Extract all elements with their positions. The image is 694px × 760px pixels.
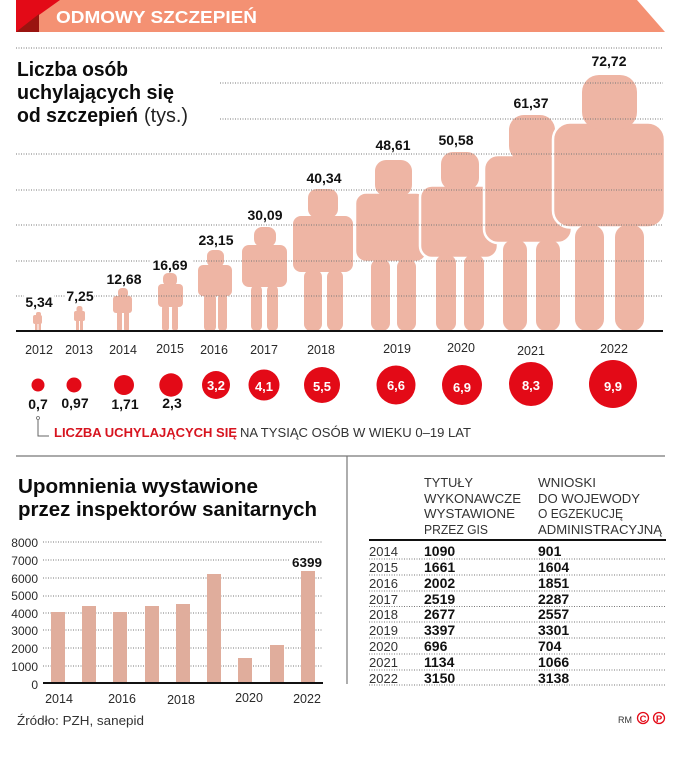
legend: LICZBA UCHYLAJĄCYCH SIĘ xyxy=(54,425,237,440)
red circles: rate per thousand: 0,7 xyxy=(28,396,48,412)
year labels: 2012 xyxy=(25,343,53,357)
person 2017 xyxy=(242,227,287,331)
y axis labels: 8000 xyxy=(11,536,38,550)
person 2015 xyxy=(158,273,183,331)
column header 1: WYKONAWCZE xyxy=(424,491,521,506)
person 2022 xyxy=(553,75,665,331)
year labels: 2018 xyxy=(307,343,335,357)
table rows: 1090 xyxy=(424,543,455,559)
person 2012 xyxy=(33,312,42,331)
table rows: 2287 xyxy=(538,591,569,607)
source: Źródło: PZH, sanepid xyxy=(17,713,144,728)
year labels xyxy=(25,341,628,358)
red circles: rate per thousand: 4,1 xyxy=(255,379,273,394)
column header 2: O EGZEKUCJĘ xyxy=(538,506,623,521)
table rows: 2015 xyxy=(369,560,398,575)
y axis labels xyxy=(11,536,38,692)
y axis labels: 2000 xyxy=(11,642,38,656)
column header 2: DO WOJEWODY xyxy=(538,491,640,506)
year labels: 2020 xyxy=(447,341,475,355)
y axis labels: 7000 xyxy=(11,554,38,568)
chart baseline xyxy=(16,330,663,332)
y axis labels: 1000 xyxy=(11,660,38,674)
person 2019 xyxy=(355,160,427,331)
year labels: 2021 xyxy=(517,344,545,358)
table rows: 1851 xyxy=(538,575,569,591)
table rows: 1604 xyxy=(538,559,569,575)
table rows: 3138 xyxy=(538,670,569,686)
table: enforcement titles and motions xyxy=(369,475,666,686)
bar chart heading: Upomnienia wystawione xyxy=(18,476,258,498)
table rows: 2017 xyxy=(369,592,398,607)
table rows: 3301 xyxy=(538,622,569,638)
bar chart heading: przez inspektorów sanitarnych xyxy=(18,499,317,521)
column header 1: WYSTAWIONE xyxy=(424,506,515,521)
bar chart: warnings: 6399 xyxy=(292,555,322,570)
table rows xyxy=(369,543,569,686)
table rows: 2020 xyxy=(369,639,398,654)
bar chart: warnings xyxy=(11,536,323,707)
value labels: 72,72 xyxy=(591,53,627,69)
header banner xyxy=(16,0,665,32)
x axis labels xyxy=(45,691,321,707)
value labels: 30,09 xyxy=(247,207,283,223)
value labels: 48,61 xyxy=(375,137,411,153)
table rows: 2002 xyxy=(424,575,455,591)
year labels: 2015 xyxy=(156,342,184,356)
red circles: rate per thousand: 5,5 xyxy=(313,379,331,394)
person 2018 xyxy=(293,189,353,331)
chart title: Liczba osób xyxy=(17,59,128,81)
value labels xyxy=(24,53,627,310)
y axis labels: 4000 xyxy=(11,607,38,621)
y axis labels: 6000 xyxy=(11,572,38,586)
value labels: 23,15 xyxy=(198,232,234,248)
credit: RM and copyright marks: P xyxy=(656,714,663,725)
table rows: 2014 xyxy=(369,544,398,559)
y axis labels: 5000 xyxy=(11,589,38,603)
year labels: 2019 xyxy=(383,342,411,356)
year labels: 2013 xyxy=(65,343,93,357)
year labels: 2016 xyxy=(200,343,228,357)
table rows: 1661 xyxy=(424,559,455,575)
red circles: rate per thousand: 8,3 xyxy=(522,378,540,393)
value labels: 61,37 xyxy=(513,95,549,111)
value labels: 12,68 xyxy=(106,271,142,287)
person 2013 xyxy=(74,306,85,331)
table rows: 1066 xyxy=(538,654,569,670)
year labels: 2017 xyxy=(250,343,278,357)
table rows: 2519 xyxy=(424,591,455,607)
x axis labels: 2022 xyxy=(293,692,321,706)
red circles: rate per thousand: 3,2 xyxy=(207,378,225,393)
column header 2: WNIOSKI xyxy=(538,475,596,490)
column header 1: TYTUŁY xyxy=(424,475,473,490)
table rows: 901 xyxy=(538,543,562,559)
table rows: 2021 xyxy=(369,655,398,670)
x axis labels: 2016 xyxy=(108,692,136,706)
legend xyxy=(36,416,471,440)
red circles: rate per thousand xyxy=(28,360,637,412)
value labels: 5,34 xyxy=(25,294,53,310)
person 2016 xyxy=(198,250,232,331)
value labels: 7,25 xyxy=(66,288,94,304)
bar chart heading xyxy=(18,476,317,521)
table rows: 3397 xyxy=(424,622,455,638)
section dividers xyxy=(16,456,665,684)
person 2014 xyxy=(113,288,132,331)
red circles: rate per thousand: 6,9 xyxy=(453,380,471,395)
table rows: 704 xyxy=(538,638,562,654)
person 2021 xyxy=(484,115,572,331)
table rows: 696 xyxy=(424,638,448,654)
table rows: 1134 xyxy=(424,654,455,670)
red circles: rate per thousand: 6,6 xyxy=(387,378,405,393)
chart title: (tys.) xyxy=(144,105,188,127)
credit: RM and copyright marks: C xyxy=(640,714,647,725)
red circles: rate per thousand: 2,3 xyxy=(162,395,182,411)
chart title xyxy=(17,59,188,127)
column header 2 xyxy=(538,475,662,537)
y axis labels: 3000 xyxy=(11,624,38,638)
year labels: 2014 xyxy=(109,343,137,357)
table rows: 2016 xyxy=(369,576,398,591)
credit: RM and copyright marks: RM xyxy=(618,715,632,725)
table rows: 3150 xyxy=(424,670,455,686)
x axis labels: 2020 xyxy=(235,691,263,705)
column header 1: PRZEZ GIS xyxy=(424,522,488,537)
x axis labels: 2014 xyxy=(45,692,73,706)
column header 1 xyxy=(424,475,521,537)
person 2020 xyxy=(420,152,498,331)
pictogram chart: people per year xyxy=(33,75,665,331)
value labels: 16,69 xyxy=(152,257,188,273)
table rows: 2019 xyxy=(369,623,398,638)
table rows: 2018 xyxy=(369,607,398,622)
bars xyxy=(51,571,315,683)
chart gridlines xyxy=(16,48,663,296)
year labels: 2022 xyxy=(600,342,628,356)
value labels: 40,34 xyxy=(306,170,342,186)
legend: NA TYSIĄC OSÓB W WIEKU 0–19 LAT xyxy=(240,425,471,440)
x axis labels: 2018 xyxy=(167,693,195,707)
red circles: rate per thousand: 0,97 xyxy=(61,395,89,411)
value labels: 50,58 xyxy=(438,132,474,148)
banner title: ODMOWY SZCZEPIEŃ xyxy=(56,6,257,27)
chart title: uchylających się xyxy=(17,82,174,104)
red circles: rate per thousand: 1,71 xyxy=(111,396,139,412)
y axis labels: 0 xyxy=(31,678,38,692)
table rows: 2022 xyxy=(369,671,398,686)
table rows: 2677 xyxy=(424,606,455,622)
column header 2: ADMINISTRACYJNĄ xyxy=(538,522,662,537)
credit: RM and copyright marks xyxy=(618,712,664,725)
red circles: rate per thousand: 9,9 xyxy=(604,379,622,394)
table rows: 2557 xyxy=(538,606,569,622)
chart title: od szczepień xyxy=(17,105,138,127)
